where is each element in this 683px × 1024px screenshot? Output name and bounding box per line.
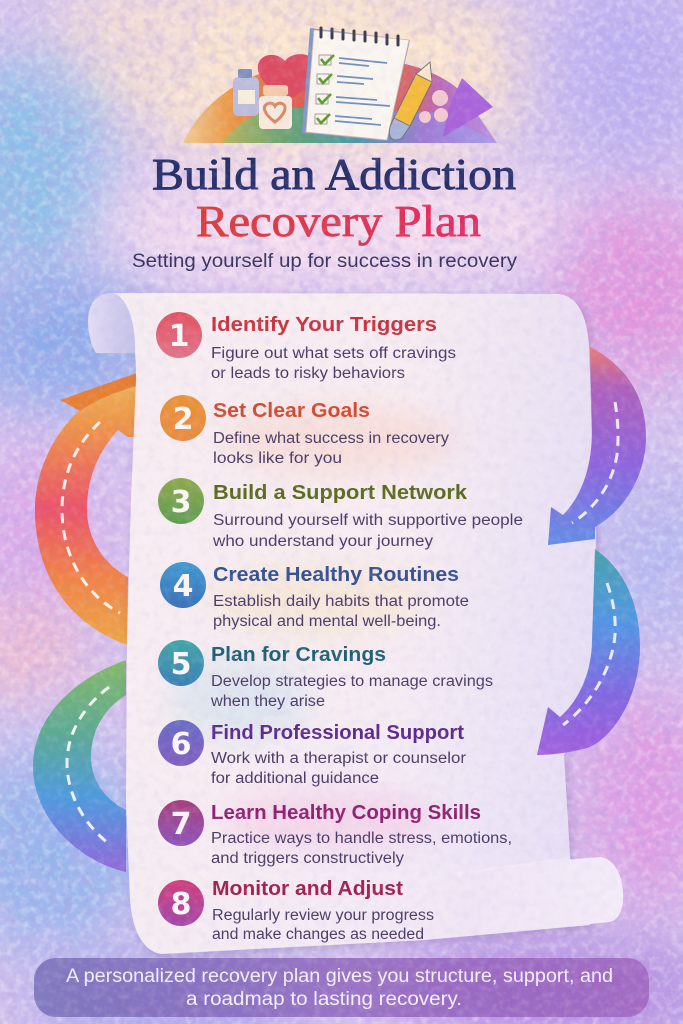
arc lower band	[222, 108, 497, 143]
footer banner	[34, 958, 649, 1017]
description 5: when they arise	[210, 693, 325, 710]
badge 7: 7	[171, 807, 191, 842]
icon: pink blobs	[419, 90, 448, 123]
description 6: for additional guidance	[211, 770, 379, 787]
description 4: physical and mental well-being.	[213, 613, 441, 630]
badge 2: 2	[173, 402, 193, 437]
step 6	[158, 720, 466, 787]
badge 3: 3	[171, 485, 191, 520]
icon: notepad checklist	[302, 28, 410, 141]
step 2	[160, 395, 449, 467]
badge 5: 5	[171, 647, 191, 682]
badge 4: 4	[173, 569, 193, 604]
badge 1: 1	[169, 319, 189, 354]
description 8: and make changes as needed	[212, 926, 424, 943]
heading 1: Identify Your Triggers	[211, 314, 437, 336]
badge 7	[158, 800, 204, 846]
header illustration: recovery plan checklist	[183, 28, 497, 143]
top-left curl	[88, 293, 135, 353]
description 7: and triggers constructively	[211, 850, 404, 867]
description 6: Work with a therapist or counselor	[211, 750, 466, 767]
step 7	[158, 800, 512, 867]
badge 1	[156, 312, 202, 358]
title line 1: Build an Addiction	[152, 150, 516, 199]
title line 2: Recovery Plan	[196, 197, 481, 246]
description 3: Surround yourself with supportive people	[213, 512, 523, 529]
description 1: Figure out what sets off cravings	[211, 345, 456, 362]
badge 8: 8	[171, 887, 191, 922]
description 3: who understand your journey	[212, 533, 433, 550]
description 5: Develop strategies to manage cravings	[211, 673, 493, 690]
paper sheet	[112, 293, 596, 954]
right arrow: lower	[537, 549, 640, 755]
badge 5	[158, 640, 204, 686]
icon: pencil	[389, 62, 432, 140]
left arrow: green to purple	[33, 660, 126, 872]
description 1: or leads to risky behaviors	[211, 365, 405, 382]
description 2: looks like for you	[213, 450, 342, 467]
badge 2	[160, 395, 206, 441]
heading 4: Create Healthy Routines	[213, 564, 459, 586]
heading 2: Set Clear Goals	[213, 400, 370, 422]
step 1	[156, 312, 456, 382]
description 8: Regularly review your progress	[212, 907, 434, 924]
heading 5: Plan for Cravings	[211, 644, 386, 666]
paper tint blotches	[170, 405, 460, 850]
badge 6: 6	[171, 727, 191, 762]
subtitle: Setting yourself up for success in recovery	[132, 251, 518, 272]
rainbow arc	[183, 58, 497, 143]
heading 7: Learn Healthy Coping Skills	[211, 802, 481, 824]
checklist rows	[315, 55, 331, 124]
footer text: A personalized recovery plan gives you structure, support, and	[66, 966, 613, 987]
step 3	[158, 478, 523, 550]
step 8	[158, 878, 434, 943]
arrow head	[443, 78, 493, 137]
left arrow: orange	[35, 373, 137, 645]
badge 8	[158, 880, 204, 926]
description 7: Practice ways to handle stress, emotions,	[211, 830, 512, 847]
step 5	[158, 640, 493, 710]
badge 3	[158, 478, 204, 524]
arrow wing	[60, 373, 137, 411]
description 2: Define what success in recovery	[213, 430, 449, 447]
bottom-right curl	[414, 857, 623, 938]
icon: bottle	[233, 69, 259, 116]
icon: heart jar	[259, 85, 292, 129]
spiral binding	[321, 28, 398, 45]
badge 4	[160, 562, 206, 608]
footer text: a roadmap to lasting recovery.	[186, 989, 462, 1010]
step 4	[160, 562, 469, 630]
paper right tint	[400, 294, 596, 880]
title	[152, 150, 516, 246]
right arrow: upper	[548, 347, 646, 545]
description 4: Establish daily habits that promote	[213, 593, 469, 610]
icon: heart	[258, 54, 312, 98]
scroll panel	[88, 293, 623, 954]
heading 3: Build a Support Network	[213, 482, 468, 504]
heading 6: Find Professional Support	[211, 722, 464, 744]
badge 6	[158, 720, 204, 766]
heading 8: Monitor and Adjust	[212, 878, 403, 900]
